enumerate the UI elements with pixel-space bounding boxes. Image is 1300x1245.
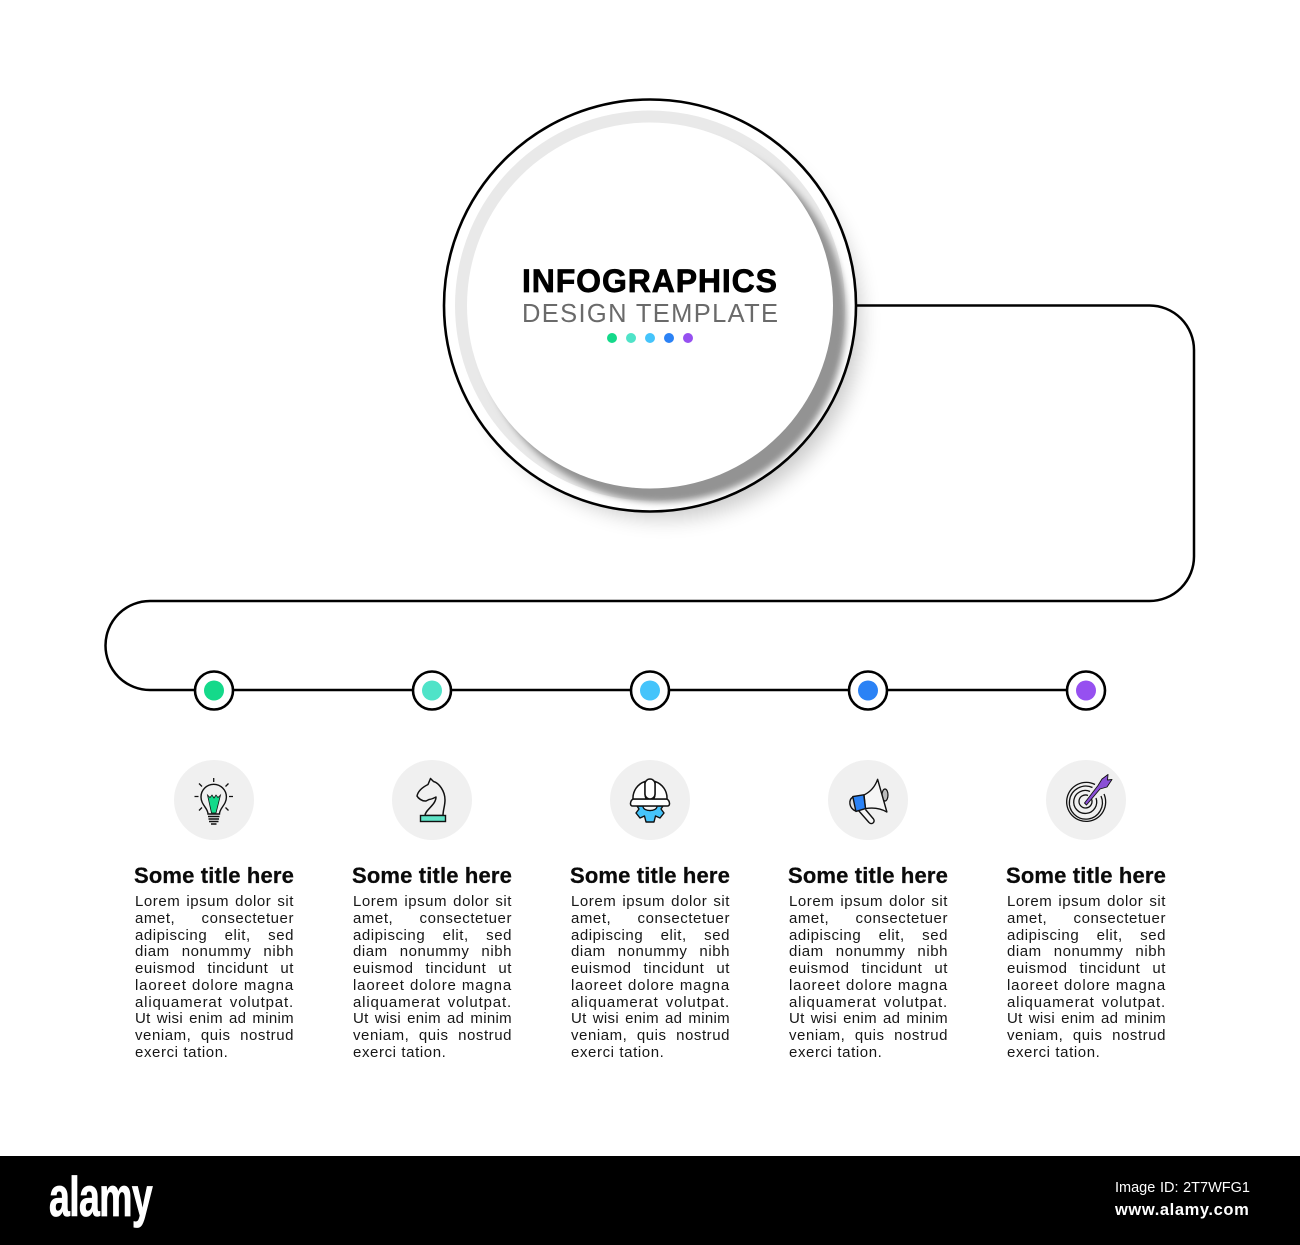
body text 1: Ut wisi enim ad minim bbox=[135, 1010, 294, 1027]
timeline node 4 bbox=[849, 672, 887, 710]
body text 1: amet, consectetuer bbox=[135, 910, 294, 927]
body text 5: amet, consectetuer bbox=[1007, 910, 1166, 927]
body text 4: adipiscing elit, sed bbox=[789, 927, 948, 944]
body text 5 bbox=[1007, 893, 1166, 1061]
body text 4: veniam, quis nostrud bbox=[789, 1027, 948, 1044]
body text 2: aliquamerat volutpat. bbox=[353, 994, 512, 1011]
body text 2 bbox=[353, 893, 512, 1061]
body text 1: laoreet dolore magna bbox=[135, 977, 294, 994]
body text 3 bbox=[571, 893, 730, 1061]
body text 2: exerci tation. bbox=[353, 1044, 446, 1061]
body text 2: laoreet dolore magna bbox=[353, 977, 512, 994]
body text 3: adipiscing elit, sed bbox=[571, 927, 730, 944]
central title: DESIGN TEMPLATE bbox=[522, 300, 778, 328]
column 5 bbox=[1006, 760, 1166, 1061]
body text 2: amet, consectetuer bbox=[353, 910, 512, 927]
column 4 bbox=[788, 760, 948, 1061]
body text 5: exerci tation. bbox=[1007, 1044, 1100, 1061]
body text 4 bbox=[789, 893, 948, 1061]
body text 1: euismod tincidunt ut bbox=[135, 960, 294, 977]
body text 2: veniam, quis nostrud bbox=[353, 1027, 512, 1044]
column 3 bbox=[570, 760, 730, 1061]
body text 5: Lorem ipsum dolor sit bbox=[1007, 893, 1166, 910]
body text 1: diam nonummy nibh bbox=[135, 943, 294, 960]
column 2 bbox=[352, 760, 512, 1061]
body text 5: euismod tincidunt ut bbox=[1007, 960, 1166, 977]
body text 5: aliquamerat volutpat. bbox=[1007, 994, 1166, 1011]
title colour dots bbox=[607, 333, 693, 343]
body text 5: diam nonummy nibh bbox=[1007, 943, 1166, 960]
body text 5: adipiscing elit, sed bbox=[1007, 927, 1166, 944]
body text 3: euismod tincidunt ut bbox=[571, 960, 730, 977]
body text 3: diam nonummy nibh bbox=[571, 943, 730, 960]
central circle bbox=[444, 100, 861, 519]
body text 5: veniam, quis nostrud bbox=[1007, 1027, 1166, 1044]
body text 1: adipiscing elit, sed bbox=[135, 927, 294, 944]
body text 2: diam nonummy nibh bbox=[353, 943, 512, 960]
body text 1: exerci tation. bbox=[135, 1044, 228, 1061]
body text 4: Lorem ipsum dolor sit bbox=[789, 893, 948, 910]
footer bar bbox=[0, 1156, 1300, 1245]
body text 1: aliquamerat volutpat. bbox=[135, 994, 294, 1011]
image id: Image ID: 2T7WFG1 bbox=[1115, 1180, 1250, 1196]
body text 2: euismod tincidunt ut bbox=[353, 960, 512, 977]
title 4: Some title here bbox=[788, 863, 948, 888]
body text 3: aliquamerat volutpat. bbox=[571, 994, 730, 1011]
icon: chess knight bbox=[392, 760, 472, 840]
body text 5: laoreet dolore magna bbox=[1007, 977, 1166, 994]
body text 3: Lorem ipsum dolor sit bbox=[571, 893, 730, 910]
timeline node 5 bbox=[1067, 672, 1105, 710]
body text 2: Ut wisi enim ad minim bbox=[353, 1010, 512, 1027]
icon: helmet and gear bbox=[610, 760, 690, 840]
body text 1: veniam, quis nostrud bbox=[135, 1027, 294, 1044]
body text 2: adipiscing elit, sed bbox=[353, 927, 512, 944]
title 2: Some title here bbox=[352, 863, 512, 888]
body text 1 bbox=[135, 893, 294, 1061]
body text 5: Ut wisi enim ad minim bbox=[1007, 1010, 1166, 1027]
central title: INFOGRAPHICS bbox=[522, 263, 777, 299]
central title bbox=[522, 263, 778, 328]
body text 3: veniam, quis nostrud bbox=[571, 1027, 730, 1044]
connector line bbox=[106, 306, 1194, 690]
body text 4: aliquamerat volutpat. bbox=[789, 994, 948, 1011]
timeline node 3 bbox=[631, 672, 669, 710]
body text 4: diam nonummy nibh bbox=[789, 943, 948, 960]
title 3: Some title here bbox=[570, 863, 730, 888]
icon: megaphone bbox=[828, 760, 908, 840]
body text 4: amet, consectetuer bbox=[789, 910, 948, 927]
icon: target with arrow bbox=[1046, 760, 1126, 840]
body text 3: exerci tation. bbox=[571, 1044, 664, 1061]
body text 1: Lorem ipsum dolor sit bbox=[135, 893, 294, 910]
body text 3: amet, consectetuer bbox=[571, 910, 730, 927]
title 1: Some title here bbox=[134, 863, 294, 888]
icon: light bulb bbox=[174, 760, 254, 840]
body text 4: euismod tincidunt ut bbox=[789, 960, 948, 977]
column 1 bbox=[134, 760, 294, 1061]
body text 2: Lorem ipsum dolor sit bbox=[353, 893, 512, 910]
body text 4: Ut wisi enim ad minim bbox=[789, 1010, 948, 1027]
website: www.alamy.com bbox=[1115, 1201, 1249, 1219]
timeline node 1 bbox=[195, 672, 233, 710]
body text 4: laoreet dolore magna bbox=[789, 977, 948, 994]
body text 3: laoreet dolore magna bbox=[571, 977, 730, 994]
body text 4: exerci tation. bbox=[789, 1044, 882, 1061]
footer logo: alamy bbox=[49, 1165, 152, 1228]
timeline node 2 bbox=[413, 672, 451, 710]
title 5: Some title here bbox=[1006, 863, 1166, 888]
body text 3: Ut wisi enim ad minim bbox=[571, 1010, 730, 1027]
